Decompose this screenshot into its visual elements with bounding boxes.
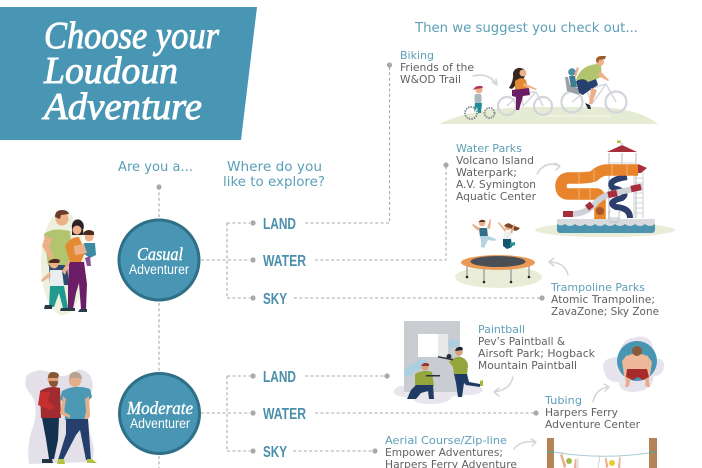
text: water parks: Volcano Island [456, 154, 534, 167]
arrow: biking [473, 75, 497, 85]
tower [607, 140, 637, 218]
jumping boy [472, 219, 496, 248]
jumping girl [498, 222, 520, 249]
badge: moderate adventurer [120, 374, 200, 454]
badge: moderate adventurer: Moderate [126, 398, 193, 418]
text: trampoline parks: Atomic Trampoline; [551, 293, 655, 306]
text: paintball: Airsoft Park; Hogback [478, 347, 596, 360]
illustration: water slide [535, 140, 675, 237]
badge: casual adventurer: Adventurer [129, 262, 189, 277]
text: tubing [544, 394, 641, 431]
illustration: paintball [393, 321, 483, 404]
text: tubing: Adventure Center [545, 418, 641, 431]
title: Loudoun [43, 50, 178, 92]
running player [438, 347, 483, 397]
badge: casual adventurer: Casual [137, 244, 183, 264]
column heading: where to explore: like to explore? [223, 175, 325, 190]
pool [557, 211, 655, 233]
labels: moderate options: LAND [263, 369, 296, 386]
illustration: adventurer couple [25, 370, 97, 464]
title: Choose your [44, 15, 219, 57]
text: tubing: Tubing [544, 394, 582, 407]
text: water parks: Waterpark; [456, 166, 517, 179]
text: water parks: A.V. Symington [456, 178, 536, 191]
father on bike with child seat [562, 56, 626, 112]
text: biking: Friends of the [400, 61, 474, 74]
arrow: tubing [593, 384, 609, 402]
ladder [634, 172, 643, 218]
labels: moderate options [263, 369, 306, 461]
arrow: paintball [494, 377, 513, 396]
illustration: family biking [439, 56, 658, 124]
text: biking [400, 49, 474, 86]
text: aerial course: Empower Adventures; [385, 446, 503, 459]
text: water parks [456, 142, 537, 203]
column heading: suggestions: Then we suggest you check out... [414, 21, 638, 36]
child on bike [465, 86, 494, 119]
illustration: trampoline [455, 219, 542, 288]
title: Adventure [41, 86, 202, 128]
illustration: tubing [603, 337, 664, 392]
column heading: where to explore [223, 160, 325, 190]
illustration: family [41, 210, 96, 315]
text: trampoline parks [550, 281, 659, 318]
illustration: aerial course [547, 438, 657, 468]
grey and red slide [563, 187, 643, 214]
text: trampoline parks: ZavaZone; Sky Zone [551, 305, 659, 318]
text: aerial course [385, 434, 517, 468]
text: paintball: Paintball [478, 323, 525, 336]
labels: moderate options: SKY [263, 444, 287, 461]
arrow: trampoline [549, 258, 568, 275]
labels: moderate options: WATER [263, 406, 306, 423]
text: tubing: Harpers Ferry [545, 406, 619, 419]
title [41, 15, 219, 128]
labels: casual options: WATER [263, 253, 306, 270]
navy spiral slide [611, 177, 630, 218]
badge: moderate adventurer: Adventurer [130, 416, 190, 431]
title banner [0, 7, 257, 140]
text: trampoline parks: Trampoline Parks [550, 281, 645, 294]
text: water parks: Aquatic Center [456, 190, 537, 203]
labels: casual options: SKY [263, 291, 287, 308]
column heading: are you a: Are you a... [118, 160, 193, 175]
kneeling player [407, 363, 440, 399]
labels: casual options: LAND [263, 216, 296, 233]
text: biking: W&OD Trail [400, 73, 461, 86]
orange slide [561, 170, 638, 219]
text: water parks: Water Parks [456, 142, 522, 155]
badge: casual adventurer [119, 220, 199, 300]
woman on bike [498, 68, 552, 115]
text: biking: Biking [400, 49, 434, 62]
arrow: aerial [514, 439, 536, 449]
text: paintball: Pev’s Paintball & [478, 335, 566, 348]
column heading: where to explore: Where do you [227, 160, 322, 175]
text: aerial course: Aerial Course/Zip-line [385, 434, 507, 447]
labels: casual options [263, 216, 306, 308]
arrow: water parks [537, 163, 560, 174]
text: paintball: Mountain Paintball [478, 359, 577, 372]
connector lines [156, 62, 545, 468]
text: paintball [478, 323, 596, 372]
